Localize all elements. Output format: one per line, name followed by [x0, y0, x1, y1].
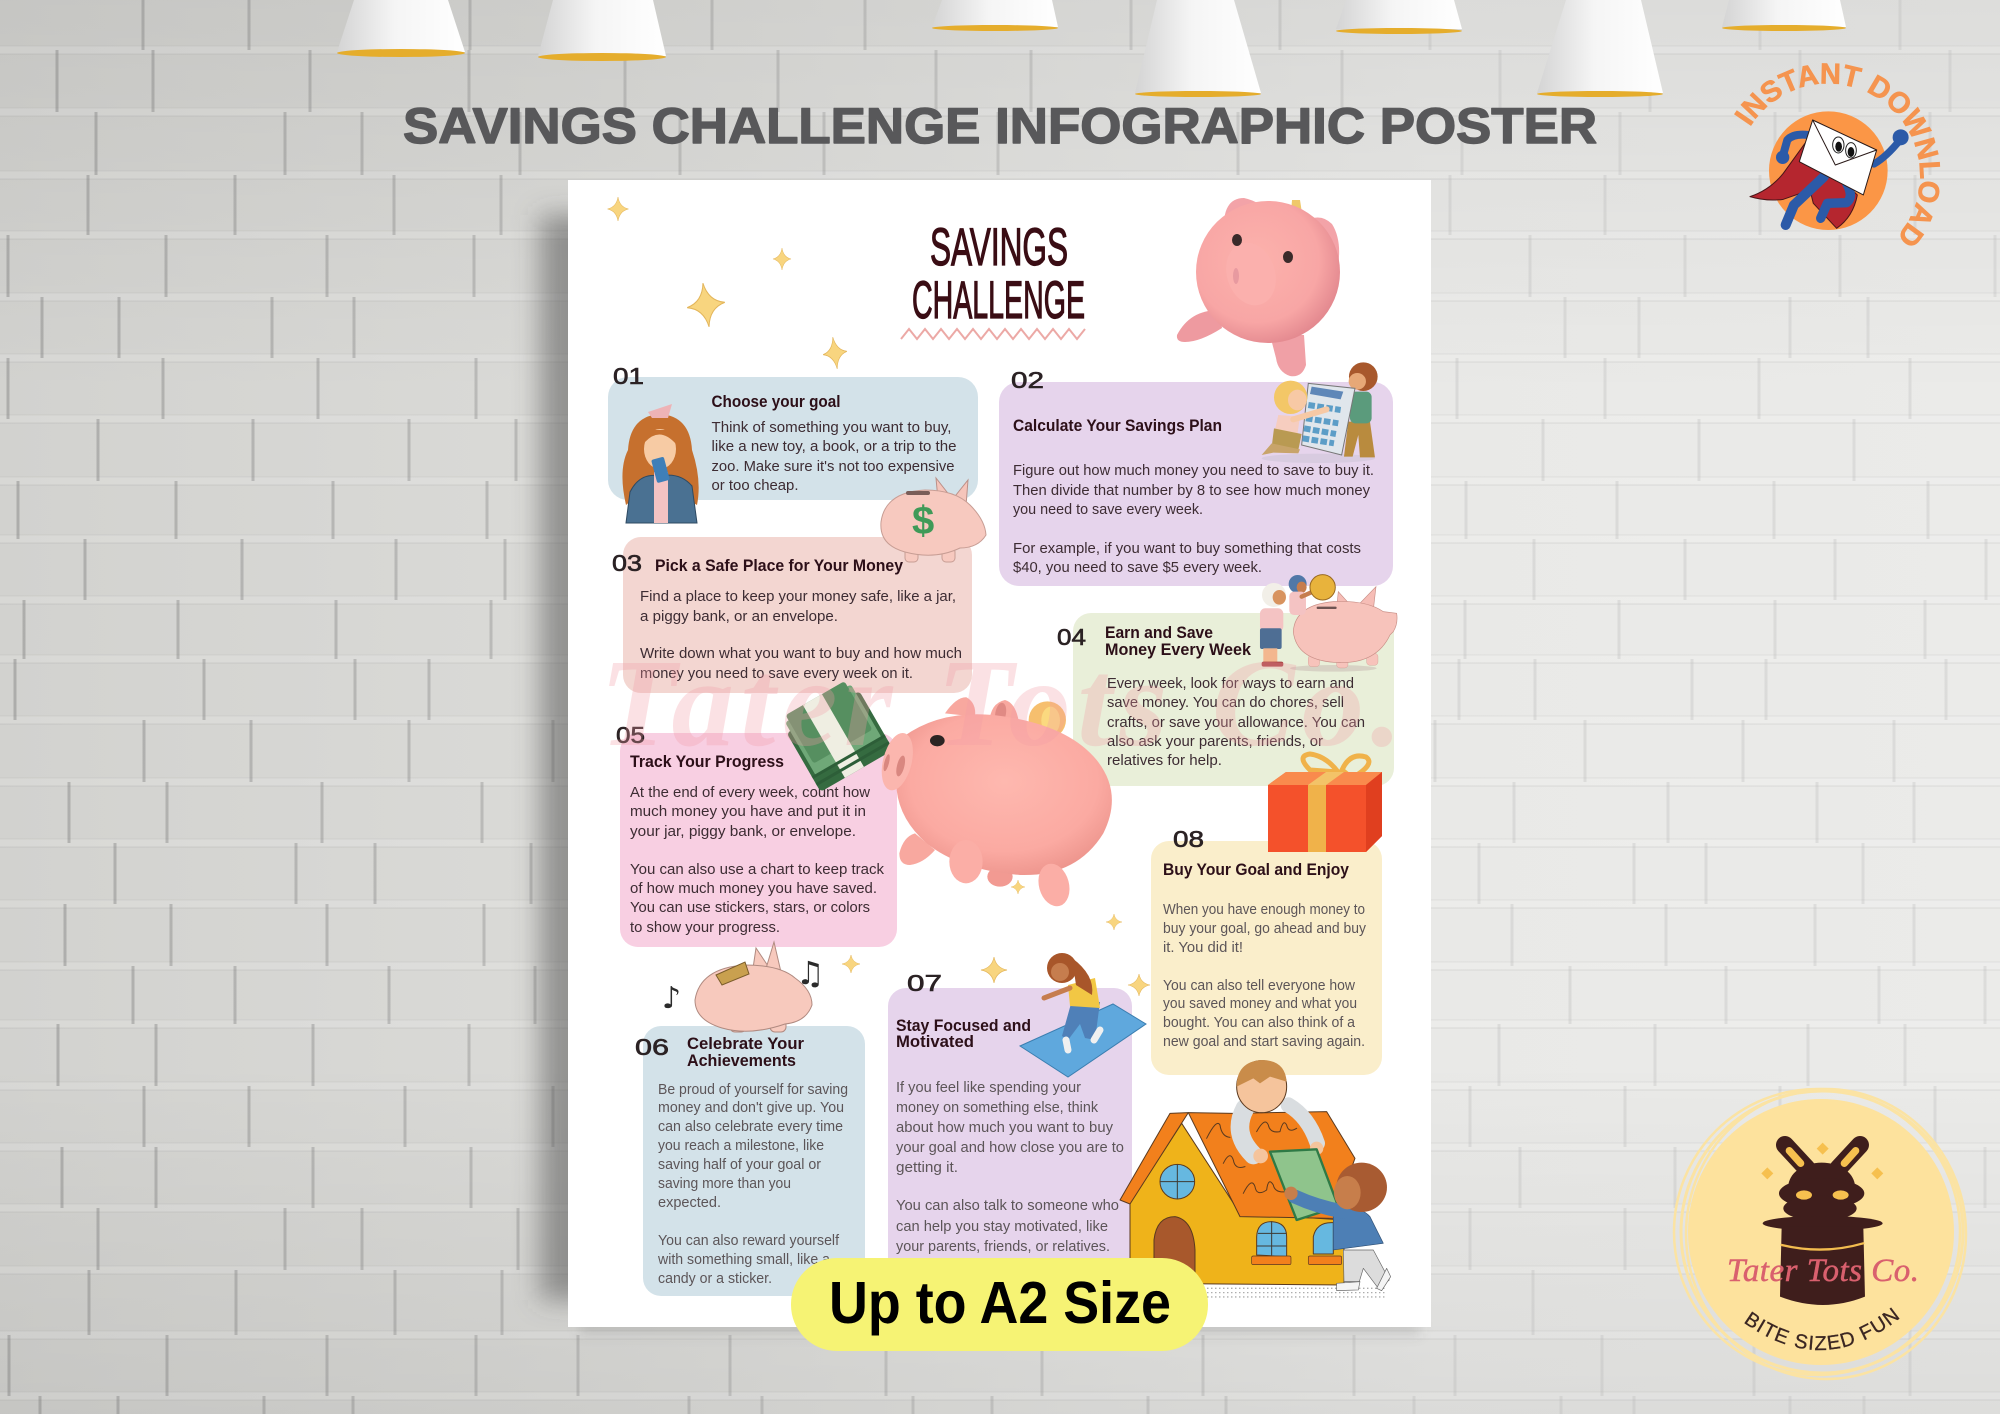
heading 04: Earn and Save: [1105, 624, 1213, 642]
page title: SAVINGS CHALLENGE INFOGRAPHIC POSTER: [403, 98, 1597, 154]
body 06: saving more than you: [658, 1176, 791, 1192]
step number 01: 01: [613, 363, 644, 389]
step number 04: 04: [1057, 624, 1086, 650]
body 04: save money. You can do chores, sell: [1107, 695, 1344, 711]
step number 06: 06: [635, 1034, 669, 1060]
body 06: can also celebrate every time: [658, 1119, 843, 1135]
body 05: to show your progress.: [630, 920, 780, 936]
dollar sign: $: [912, 499, 934, 543]
body 06: you reach a milestone, like: [658, 1138, 824, 1154]
body 02: Figure out how much money you need to save to buy it.: [1013, 463, 1374, 479]
ground dots: [1207, 1288, 1387, 1297]
icon: flying envelope superhero: [1750, 111, 1909, 230]
body 03: Find a place to keep your money safe, like a jar,: [640, 589, 956, 605]
icon: top 3D piggy: [1177, 198, 1340, 376]
panel: step 08 buy your goal: [1151, 826, 1382, 1075]
brand logo badge: [1672, 1088, 1968, 1380]
body 06: Be proud of yourself for saving: [658, 1082, 848, 1098]
body 02: For example, if you want to buy something that costs: [1013, 541, 1361, 557]
heading 05: Track Your Progress: [630, 753, 784, 771]
body 01: or too cheap.: [712, 478, 798, 494]
instant download badge: [1734, 63, 1940, 246]
body 05: much money you have and put it in: [630, 804, 866, 820]
windows and door: [1160, 1164, 1195, 1199]
panel: step 04 earn and save: [1057, 613, 1394, 786]
body 06: candy or a sticker.: [658, 1271, 772, 1287]
heading 01: Choose your goal: [712, 393, 840, 411]
roof squiggles: [1207, 1122, 1297, 1193]
poster sheet: [568, 180, 1431, 1327]
icon: piggy with coins and music notes: [662, 942, 825, 1032]
icon: bunny in top hat: [1761, 1143, 1883, 1305]
heading line one: SAVINGS: [930, 218, 1068, 277]
card 08 background: [1151, 841, 1382, 1075]
right music note: ♫: [796, 954, 825, 992]
panel: step 07 stay focused: [888, 970, 1132, 1290]
body 07: getting it.: [896, 1160, 958, 1176]
body 02: you need to save every week.: [1013, 502, 1203, 518]
body 08: you saved money and what you: [1163, 996, 1357, 1012]
heading 07: Motivated: [896, 1033, 974, 1051]
body 03: money you need to save every week on it.: [640, 666, 913, 682]
step number 03: 03: [612, 550, 642, 576]
logo disc and rings: [1674, 1089, 1966, 1379]
body 08: new goal and start saving again.: [1163, 1034, 1365, 1050]
body 01: like a new toy, a book, or a trip to the: [712, 439, 956, 455]
body 08: bought. You can also think of a: [1163, 1015, 1356, 1031]
body 08: You can also tell everyone how: [1163, 978, 1356, 994]
logo brand name: Tater Tots Co.: [1727, 1253, 1919, 1289]
step number 08: 08: [1173, 826, 1204, 852]
body 06: [657, 1082, 848, 1287]
pill background: [791, 1258, 1208, 1351]
body 04: Every week, look for ways to earn and: [1107, 676, 1354, 692]
pill text: Up to A2 Size: [829, 1270, 1171, 1336]
logo tagline: BITE SIZED FUN: [1744, 1308, 1900, 1350]
heading 06: Achievements: [687, 1052, 796, 1070]
body 04: also ask your parents, friends, or: [1107, 734, 1323, 750]
body 03: a piggy bank, or an envelope.: [640, 609, 838, 625]
body 07: [896, 1080, 1124, 1255]
icon: piggy with dollar sign: [881, 478, 986, 562]
body 06: money and don't give up. You: [658, 1100, 844, 1116]
panel: step 03 safe place: [612, 537, 972, 693]
body 05: You can use stickers, stars, or colors: [630, 900, 870, 916]
poster heading: [901, 218, 1085, 339]
green book: [1270, 1149, 1338, 1220]
body 04: [1107, 676, 1365, 769]
card 06 background: [643, 1026, 865, 1296]
size callout pill: [791, 1258, 1208, 1351]
left music note: ♪: [662, 981, 681, 1016]
step number 02: 02: [1011, 367, 1044, 393]
heading 03: Pick a Safe Place for Your Money: [655, 557, 904, 575]
body 01: zoo. Make sure it's not too expensive: [712, 459, 954, 475]
heading 04: Money Every Week: [1105, 641, 1252, 659]
heading line two: CHALLENGE: [912, 271, 1085, 330]
body 06: with something small, like a: [657, 1252, 831, 1268]
body 02: $40, you need to save $5 every week.: [1013, 560, 1262, 576]
card 07 background: [888, 988, 1132, 1290]
body 07: If you feel like spending your: [896, 1080, 1081, 1096]
icon: children with calculator: [1262, 362, 1378, 463]
heading 02: Calculate Your Savings Plan: [1013, 417, 1222, 435]
body 08: [1163, 902, 1367, 1050]
poster shadow: [540, 215, 600, 1300]
heading 06: [687, 1035, 805, 1070]
body 05: [630, 785, 885, 936]
step number 07: 07: [907, 970, 942, 996]
body 05: your jar, piggy bank, or envelope.: [630, 824, 856, 840]
roof: [1188, 1112, 1355, 1218]
lower boy: [1343, 1250, 1389, 1288]
upper boy: [1240, 1108, 1253, 1155]
icon: big 3D piggy with coin: [876, 697, 1112, 910]
body 08: buy your goal, go ahead and buy: [1163, 921, 1367, 937]
body 03: [640, 589, 962, 682]
coins in slot: [716, 962, 749, 985]
body 05: At the end of every week, count how: [630, 785, 871, 801]
icon: girl skating on credit card: [1020, 953, 1146, 1077]
poster bottom shadow: [580, 1322, 1420, 1334]
heading 06: Celebrate Your: [687, 1035, 805, 1053]
house wall: [1130, 1123, 1344, 1285]
body 04: crafts, or save your allowance. You can: [1107, 715, 1365, 731]
body 07: your goal and how close you are to: [896, 1140, 1124, 1156]
hanging lamps: [337, 0, 1846, 97]
heading 08: Buy Your Goal and Enjoy: [1163, 861, 1350, 879]
decorative gold stars: [608, 197, 1150, 996]
panel: step 05 track progress: [616, 722, 897, 947]
body 01: Think of something you want to buy,: [712, 420, 952, 436]
body 08: it. You did it!: [1163, 940, 1243, 956]
illustration: house with two boys: [1120, 1060, 1391, 1297]
panel: step 06 celebrate achievements: [635, 1026, 865, 1296]
body 07: about how much you want to buy: [896, 1120, 1114, 1136]
body 01: [712, 420, 956, 494]
body 07: You can also talk to someone who: [896, 1198, 1119, 1214]
body 06: You can also reward yourself: [658, 1233, 840, 1249]
body 07: can help you stay motivated, like: [896, 1219, 1108, 1235]
body 04: relatives for help.: [1107, 753, 1222, 769]
icon: children with big piggy bank and coin: [1260, 575, 1397, 672]
body 06: saving half of your goal or: [658, 1157, 821, 1173]
card 02 background: [999, 382, 1393, 586]
body 02: Then divide that number by 8 to see how much money: [1013, 483, 1371, 499]
body 07: your parents, friends, or relatives.: [896, 1239, 1110, 1255]
card 03 background: [623, 537, 972, 693]
heading 07: [896, 1017, 1031, 1051]
panel: step 02 calculate savings plan: [999, 367, 1393, 586]
watermark: Tater Tots Co.: [600, 635, 1402, 773]
card 05 background: [620, 733, 897, 947]
step number 05: 05: [616, 722, 645, 748]
zigzag underline: [901, 329, 1085, 339]
card 04 background: [1073, 613, 1394, 786]
panel: step 01 choose your goal: [608, 363, 978, 500]
card 01 background: [608, 377, 978, 500]
icon: gift box: [1268, 754, 1382, 852]
body 05: You can also use a chart to keep track: [630, 862, 885, 878]
body 05: of how much money you have saved.: [630, 881, 877, 897]
body 08: When you have enough money to: [1163, 902, 1365, 918]
body 07: money on something else, think: [896, 1100, 1099, 1116]
body 02: [1013, 463, 1374, 576]
body 03: Write down what you want to buy and how much: [640, 646, 962, 662]
heading 04: [1105, 624, 1252, 659]
icon: girl with phone: [622, 404, 699, 523]
icon: stack of money: [779, 677, 893, 792]
heading 07: Stay Focused and: [896, 1017, 1031, 1035]
body 06: expected.: [658, 1195, 721, 1211]
badge curved text: INSTANT DOWNLOAD: [1734, 63, 1940, 246]
